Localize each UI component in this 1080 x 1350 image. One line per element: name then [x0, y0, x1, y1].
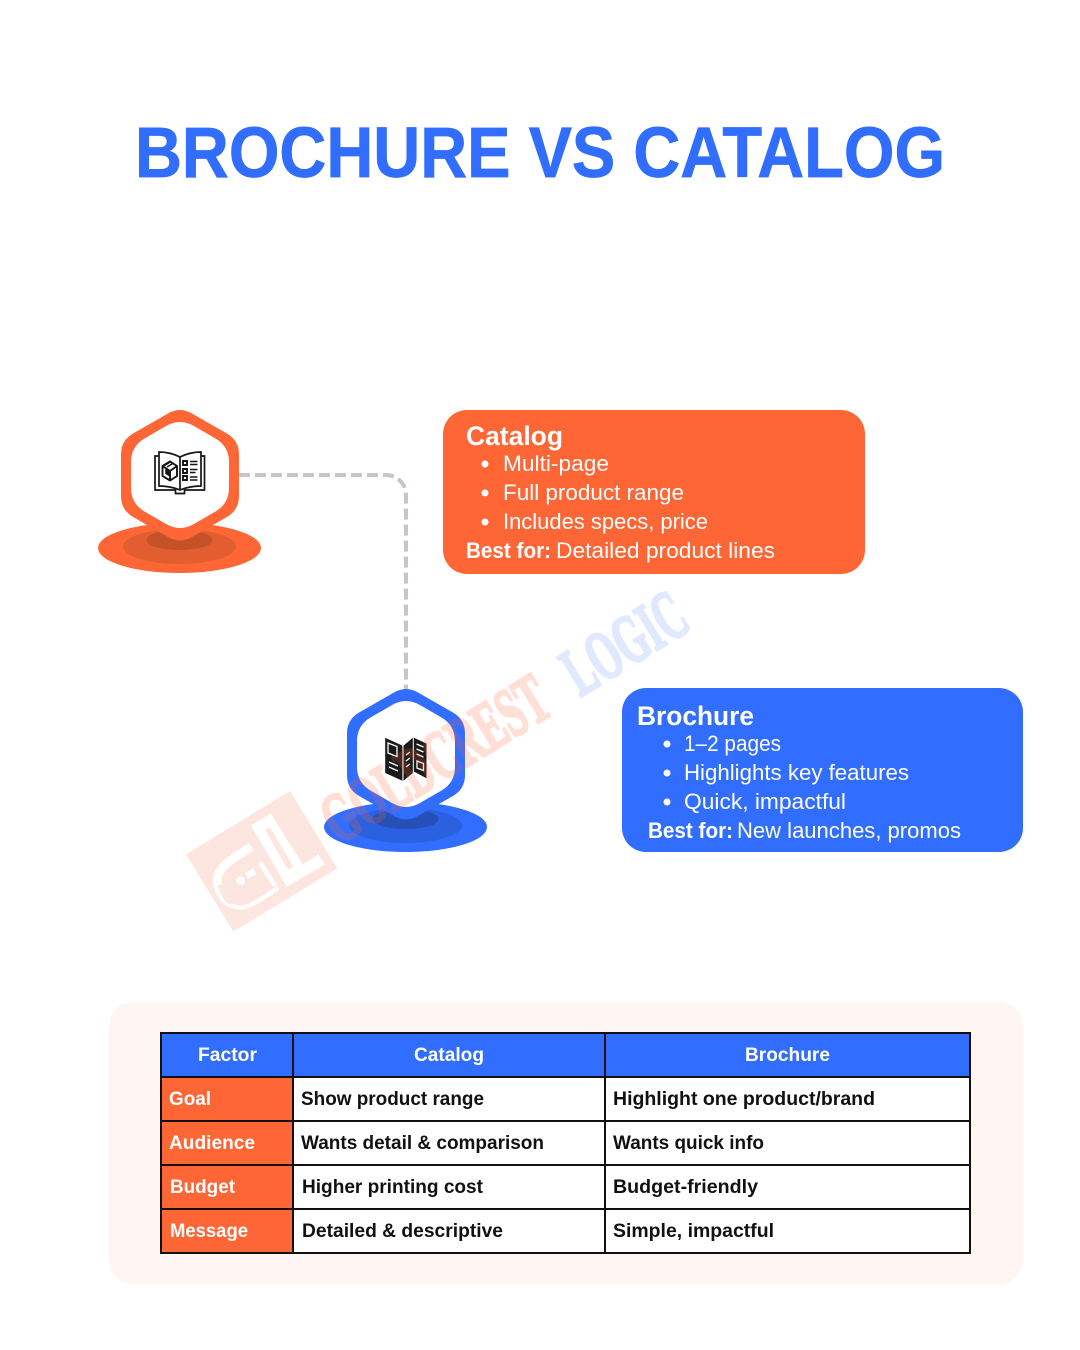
icon: brochure pin [324, 689, 487, 852]
list: catalog features: Includes specs, price [503, 509, 708, 534]
factor column [161, 1077, 293, 1253]
factor column: Goal [169, 1089, 211, 1110]
heading: brochure: Brochure [637, 701, 754, 731]
panel: catalog [443, 410, 865, 574]
text: catalog best for: Best for: [466, 538, 551, 563]
list: brochure features: Quick, impactful [684, 789, 846, 814]
icon: catalog pin [98, 410, 261, 573]
list: brochure features [664, 731, 909, 814]
watermark text: LOGIC [548, 576, 701, 711]
watermark [186, 576, 701, 932]
brochure column: Highlight one product/brand [613, 1089, 875, 1110]
list: catalog features: Full product range [503, 480, 684, 505]
catalog column [293, 1077, 605, 1253]
table header row: Brochure [745, 1045, 830, 1066]
catalog column: Wants detail & comparison [301, 1133, 544, 1154]
list: catalog features [482, 451, 708, 534]
brochure column: Budget-friendly [613, 1177, 758, 1198]
icon: tri-fold brochure [385, 738, 426, 781]
catalog column: Higher printing cost [302, 1177, 484, 1198]
table grid lines [161, 1033, 970, 1253]
brochure column: Wants quick info [613, 1133, 764, 1154]
catalog column: Detailed & descriptive [302, 1221, 503, 1242]
brochure column [605, 1077, 970, 1253]
title: BROCHURE VS CATALOG [135, 114, 945, 193]
text: catalog best for [466, 538, 775, 563]
heading: catalog: Catalog [466, 421, 563, 451]
panel: brochure [622, 688, 1023, 852]
text: brochure best for: Best for: [648, 818, 733, 843]
comparison table [161, 1033, 970, 1253]
panel: comparison table background [109, 1002, 1023, 1284]
table header row [161, 1033, 970, 1077]
factor column: Message [170, 1221, 248, 1242]
icon: open catalog book [155, 452, 204, 494]
list: brochure features: Highlights key features [684, 760, 909, 785]
factor column: Budget [170, 1177, 236, 1198]
text: brochure best for: New launches, promos [737, 818, 961, 843]
list: catalog features: Multi-page [503, 451, 609, 476]
factor column: Audience [169, 1133, 255, 1154]
brochure column: Simple, impactful [613, 1221, 774, 1242]
text: catalog best for: Detailed product lines [556, 538, 775, 563]
dashed connector arrow between icons [239, 475, 406, 689]
watermark logo [186, 791, 337, 932]
table header row: Factor [198, 1045, 258, 1066]
table header row: Catalog [414, 1045, 484, 1066]
catalog column: Show product range [301, 1089, 484, 1110]
list: brochure features: 1–2 pages [684, 731, 781, 756]
watermark text: GOLDCREST [307, 660, 564, 859]
